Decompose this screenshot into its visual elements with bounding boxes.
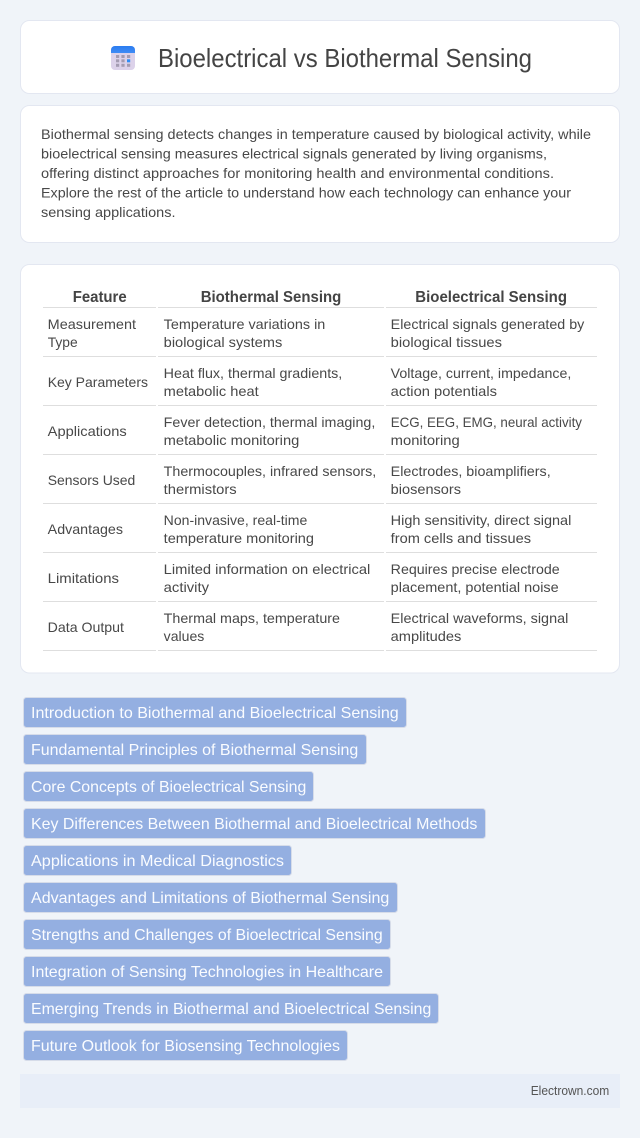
button: strengths and challenges: Strengths and Challenges of Bioelectrical Sensing — [31, 927, 383, 944]
row: data output: Data Output — [48, 619, 124, 635]
button: integration — [24, 956, 390, 986]
row: applications: Applications — [48, 423, 127, 439]
button: core concepts — [24, 772, 314, 802]
row: advantages: temperature monitoring — [164, 530, 314, 546]
button: key differences: Key Differences Between Biothermal and Bioelectrical Methods — [31, 816, 477, 833]
button: future outlook: Future Outlook for Biosensing Technologies — [31, 1038, 340, 1055]
text block: introduction paragraph: Explore the rest of the article to understand how each technology can enhance your — [41, 184, 571, 200]
text block: introduction paragraph: bioelectrical sensing measures electrical signals generated by living organisms, — [41, 146, 547, 162]
footer — [20, 1074, 620, 1108]
text block: introduction paragraph: sensing applications. — [41, 204, 176, 220]
row: key parameters: Voltage, current, impedance, — [391, 365, 571, 381]
row: applications: ECG, EEG, EMG, neural activity — [391, 414, 582, 430]
title: Bioelectrical vs Biothermal Sensing — [158, 45, 532, 73]
row: advantages: High sensitivity, direct signal — [391, 512, 571, 528]
row: sensors used: Sensors Used — [48, 472, 135, 488]
row: limitations: Requires precise electrode — [391, 561, 560, 577]
row: key parameters: action potentials — [391, 383, 497, 399]
button: fundamental principles: Fundamental Principles of Biothermal Sensing — [31, 742, 358, 759]
row: advantages: from cells and tissues — [391, 530, 531, 546]
row: data output: amplitudes — [391, 628, 461, 644]
button: advantages and limitations: Advantages and Limitations of Biothermal Sensing — [31, 890, 389, 907]
row: measurement type — [43, 316, 597, 357]
table header row — [43, 289, 597, 308]
row: measurement type: biological systems — [164, 334, 282, 350]
row: key parameters: Key Parameters — [48, 374, 148, 390]
button: strengths and challenges — [24, 920, 390, 950]
row: limitations: placement, potential noise — [391, 579, 559, 595]
button: core concepts: Core Concepts of Bioelectrical Sensing — [31, 779, 306, 796]
button: fundamental principles — [24, 734, 366, 764]
button: integration: Integration of Sensing Technologies in Healthcare — [31, 964, 383, 981]
row: advantages: Non-invasive, real-time — [164, 512, 308, 528]
table header row: Biothermal Sensing — [201, 289, 341, 306]
button: emerging trends — [24, 994, 438, 1024]
row: limitations: Limitations — [48, 570, 119, 586]
text block: introduction paragraph: offering distinct approaches for monitoring health and environmental conditions. — [41, 165, 554, 181]
row: data output — [43, 610, 597, 651]
row: advantages: Advantages — [48, 521, 123, 537]
row: measurement type: Temperature variations in — [164, 316, 325, 332]
panel: introduction — [20, 106, 620, 242]
row: sensors used: Thermocouples, infrared sensors, — [164, 463, 376, 479]
icon: calendar — [111, 46, 135, 70]
row: applications: metabolic monitoring — [164, 432, 299, 448]
button: applications: Applications in Medical Diagnostics — [31, 853, 284, 870]
button: introduction — [24, 698, 406, 728]
row: applications: monitoring — [391, 432, 460, 448]
row: limitations: Limited information on electrical — [164, 561, 370, 577]
button: future outlook — [24, 1030, 348, 1060]
row: data output: Electrical waveforms, signal — [391, 610, 568, 626]
row: limitations — [43, 561, 597, 602]
row: measurement type: Measurement — [48, 316, 136, 332]
panel: comparison table — [20, 264, 620, 673]
button: emerging trends: Emerging Trends in Biothermal and Bioelectrical Sensing — [31, 1001, 431, 1018]
button: advantages and limitations — [24, 882, 398, 912]
text block: introduction paragraph — [41, 126, 591, 220]
panel: title header — [20, 20, 620, 94]
row: sensors used: biosensors — [391, 481, 461, 497]
row: sensors used: thermistors — [164, 481, 237, 497]
row: data output: Thermal maps, temperature — [164, 610, 340, 626]
row: data output: values — [164, 628, 204, 644]
row: sensors used — [43, 463, 597, 504]
footer credit: Electrown.com — [531, 1084, 609, 1098]
row: key parameters: metabolic heat — [164, 383, 259, 399]
button: introduction: Introduction to Biothermal and Bioelectrical Sensing — [31, 705, 399, 722]
button: applications — [24, 846, 292, 876]
table header row: Bioelectrical Sensing — [415, 289, 567, 306]
row: key parameters: Heat flux, thermal gradients, — [164, 365, 342, 381]
row: sensors used: Electrodes, bioamplifiers, — [391, 463, 551, 479]
button: key differences — [24, 808, 486, 838]
row: advantages — [43, 512, 597, 553]
table of contents buttons — [24, 698, 486, 1060]
row: measurement type: biological tissues — [391, 334, 502, 350]
row: measurement type: Electrical signals generated by — [391, 316, 584, 332]
row: measurement type: Type — [48, 334, 78, 350]
text block: introduction paragraph: Biothermal sensing detects changes in temperature caused by biological activity, while — [41, 126, 591, 142]
row: applications: Fever detection, thermal imaging, — [164, 414, 375, 430]
row: key parameters — [43, 365, 597, 406]
row: limitations: activity — [164, 579, 209, 595]
table header row: Feature — [73, 289, 127, 306]
row: applications — [43, 414, 597, 455]
